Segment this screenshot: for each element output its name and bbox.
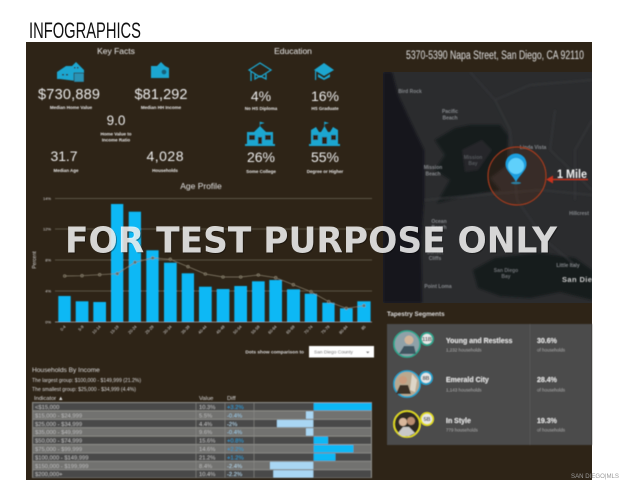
- stat: households: [146, 148, 184, 173]
- map: ocean: [383, 72, 424, 303]
- panel: education: [245, 46, 344, 174]
- income table: -0.4%: [227, 413, 242, 419]
- map labels: Ocean: [431, 219, 447, 225]
- income table: +1.2%: [227, 455, 244, 461]
- income table: -2.4%: [227, 464, 242, 470]
- map labels: Beach: [425, 172, 441, 178]
- income table: +3.2%: [227, 405, 244, 411]
- x axis labels: 20-24: [127, 324, 138, 335]
- income table: 10.4%: [199, 472, 215, 478]
- map labels: Bay: [501, 274, 511, 280]
- x axis labels: 55-59: [250, 324, 261, 335]
- segment: emerald city: [394, 371, 566, 397]
- segment: in style: 19.3%: [537, 418, 558, 425]
- stat: no HS diploma: No HS Diploma: [245, 106, 278, 111]
- income table: +2.2%: [227, 447, 244, 453]
- x axis labels: 65-69: [285, 324, 296, 335]
- largest and smallest group notes: The largest group: $100,000 - $149,999 (21.2%): [32, 378, 141, 384]
- income table: -0.4%: [227, 430, 242, 436]
- map labels: Linda Vista: [520, 145, 547, 151]
- income table: 14.6%: [199, 447, 215, 453]
- icon: location pin: [506, 153, 526, 184]
- map labels: Mission: [424, 165, 442, 171]
- stat: households: Households: [152, 168, 178, 173]
- segment: young and restless: [394, 331, 566, 357]
- income table: 5.5%: [199, 413, 212, 419]
- heading: education: Education: [274, 46, 312, 56]
- income table: -2%: [227, 422, 237, 428]
- stat: some college: Some College: [246, 169, 276, 174]
- table header: [34, 396, 236, 402]
- x axis labels: 75-79: [320, 324, 331, 335]
- panel: age profile chart: [32, 181, 374, 358]
- x axis labels: 50-54: [232, 324, 243, 335]
- label: 1 mile: 1 Mile: [557, 169, 587, 181]
- stat: degree or higher: Degree or Higher: [307, 169, 344, 174]
- income table: <$15,000: [35, 405, 59, 411]
- segment: young and restless: Young and Restless: [446, 338, 512, 345]
- table header: Value: [199, 396, 213, 402]
- stat: no HS diploma: 4%: [251, 88, 271, 104]
- income table: [32, 402, 372, 478]
- stat: home value to income ratio: Income Ratio: [102, 138, 130, 142]
- panel: key facts: [38, 46, 188, 173]
- segment: in style: In Style: [446, 418, 471, 425]
- x axis labels: 0-4: [59, 324, 67, 332]
- y axis labels: 4%: [45, 288, 51, 294]
- income table: $75,000 - $99,999: [35, 447, 82, 453]
- map label: San Diego: San Diego: [562, 275, 602, 284]
- stat: home value to income ratio: Home Value to: [100, 132, 132, 136]
- map labels: Cliffs: [429, 256, 441, 262]
- segment: emerald city: 8B: [422, 376, 430, 382]
- segment: in style: of households: [537, 428, 566, 432]
- y axis title: Percent: [32, 251, 38, 269]
- map labels: Little Italy: [556, 263, 580, 269]
- stat: degree or higher: [307, 149, 344, 174]
- income table: $150,000 - $199,999: [35, 464, 89, 470]
- icon: outline graduation cap: [249, 63, 271, 81]
- stat: median household income: Median HH Income: [141, 105, 182, 110]
- segment: emerald city: 1,143 households: [446, 388, 482, 392]
- comparison dropdown: [245, 346, 374, 358]
- stat: median household income: $81,292: [134, 87, 188, 103]
- one mile radius circle: [488, 147, 546, 205]
- icon: school: [245, 122, 275, 146]
- stat: no HS diploma: [245, 88, 278, 111]
- segment: young and restless: 11B: [422, 337, 432, 343]
- x axis labels: 15-19: [109, 324, 120, 335]
- y axis labels: [43, 196, 51, 324]
- x axis labels: 25-29: [144, 324, 155, 335]
- segment: emerald city: of households: [537, 388, 566, 392]
- x axis labels: 70-74: [303, 324, 314, 335]
- segment: in style: [394, 411, 566, 437]
- x axis labels: 40-44: [197, 324, 208, 335]
- income table: $15,000 - $24,999: [35, 413, 82, 419]
- income table: $50,000 - $74,999: [35, 439, 82, 445]
- map labels: Sunset: [427, 250, 444, 256]
- stat: HS graduate: [311, 88, 339, 111]
- map labels: Bird Rock: [398, 89, 422, 95]
- icon: wallet: [151, 62, 169, 78]
- watermark: test purpose: FOR TEST PURPOSE ONLY: [65, 220, 558, 262]
- segment: young and restless: of households: [537, 348, 566, 352]
- map labels: Point Loma: [424, 284, 452, 290]
- income table: 8.4%: [199, 464, 212, 470]
- largest and smallest group notes: The smallest group: $25,000 - $34,999 (4.4%): [32, 387, 136, 393]
- icon: filled graduation cap: [314, 63, 334, 80]
- segment: emerald city: Emerald City: [446, 377, 489, 384]
- stat: some college: [246, 149, 276, 174]
- x axis labels: 85: [360, 324, 367, 331]
- income table: $200,000+: [35, 472, 63, 478]
- bars: [58, 204, 371, 322]
- income table: 21.2%: [199, 455, 215, 461]
- income table: -2.2%: [227, 472, 242, 478]
- map labels: Mission: [464, 155, 482, 161]
- segment: in style: 779 households: [446, 428, 479, 432]
- map: san diego bay: [473, 253, 592, 300]
- table header: Diff: [227, 396, 236, 402]
- heading: households by income: Households By Income: [32, 367, 100, 374]
- x axis labels: 10-14: [91, 324, 102, 335]
- y axis labels: 12%: [43, 226, 51, 232]
- stat: median home value: [38, 87, 100, 110]
- stat: home value to income ratio: [100, 113, 132, 142]
- x axis labels: 35-39: [180, 324, 191, 335]
- stat: degree or higher: 55%: [311, 149, 339, 165]
- income table: 4.4%: [199, 422, 212, 428]
- stat: median household income: [134, 87, 188, 110]
- icon: university: [309, 122, 340, 146]
- x axis labels: 60-64: [267, 324, 278, 335]
- stat: median age: Median Age: [53, 168, 79, 173]
- income table: 15.6%: [199, 439, 215, 445]
- x axis labels: 5-9: [77, 324, 85, 332]
- x axis labels: 45-49: [215, 324, 226, 335]
- y axis labels: 0%: [45, 320, 51, 324]
- y axis labels: 14%: [43, 196, 51, 201]
- stat: HS graduate: HS Graduate: [311, 106, 339, 111]
- watermark: test purpose: FOR TEST PURPOSE ONLY: [66, 222, 559, 262]
- segment: emerald city: 28.4%: [537, 377, 558, 384]
- segment: young and restless: 30.6%: [537, 338, 558, 345]
- comparison dropdown: San Diego County: [314, 350, 354, 356]
- title: INFOGRAPHICS: [29, 18, 141, 43]
- stat: home value to income ratio: 9.0: [107, 113, 125, 128]
- income table: $25,000 - $34,999: [35, 422, 82, 428]
- map labels: Bay: [468, 161, 478, 167]
- map labels: [398, 89, 589, 290]
- panel: tapestry segments: [387, 311, 592, 445]
- largest and smallest group notes: [32, 378, 141, 393]
- stat: HS graduate: 16%: [311, 88, 339, 104]
- x axis labels: [59, 324, 367, 335]
- stat: households: 4,028: [146, 148, 184, 164]
- income table: 9.6%: [199, 430, 212, 436]
- y axis labels: 8%: [45, 258, 51, 262]
- income table: $100,000 - $149,999: [35, 455, 89, 461]
- stat: median age: [50, 148, 79, 173]
- map labels: Pacific: [442, 109, 458, 115]
- segment: in style: 5B: [423, 417, 431, 423]
- comparison line with dots: [63, 257, 365, 310]
- heading: tapestry segments: Tapestry Segments: [387, 311, 445, 318]
- map labels: Beach: [442, 116, 458, 122]
- table header: Indicator ▲: [34, 396, 64, 402]
- panel: map: [383, 72, 602, 303]
- panel: households by income: [32, 367, 372, 478]
- map labels: Beach: [431, 225, 447, 231]
- map labels: San Diego: [494, 268, 518, 274]
- map: mission bay: [435, 125, 508, 203]
- income table: +0.8%: [227, 439, 244, 445]
- stat: some college: 26%: [247, 149, 275, 165]
- segment: young and restless: 1,232 households: [446, 348, 482, 352]
- stat: median age: 31.7: [50, 148, 78, 164]
- heading: age profile: Age Profile: [180, 181, 222, 191]
- income table: 10.3%: [199, 405, 215, 411]
- stat: median home value: $730,889: [38, 87, 100, 103]
- icon: houses: [57, 62, 84, 82]
- heading: key facts: Key Facts: [97, 46, 135, 56]
- x axis labels: 80-84: [338, 324, 349, 335]
- stat: median home value: Median Home Value: [50, 105, 93, 110]
- x axis labels: 30-34: [162, 324, 173, 335]
- income table: $35,000 - $49,999: [35, 430, 82, 436]
- map labels: Hillcrest: [569, 211, 589, 217]
- comparison dropdown: Dots show comparison to: [245, 350, 304, 356]
- arrow: one mile: [546, 176, 588, 184]
